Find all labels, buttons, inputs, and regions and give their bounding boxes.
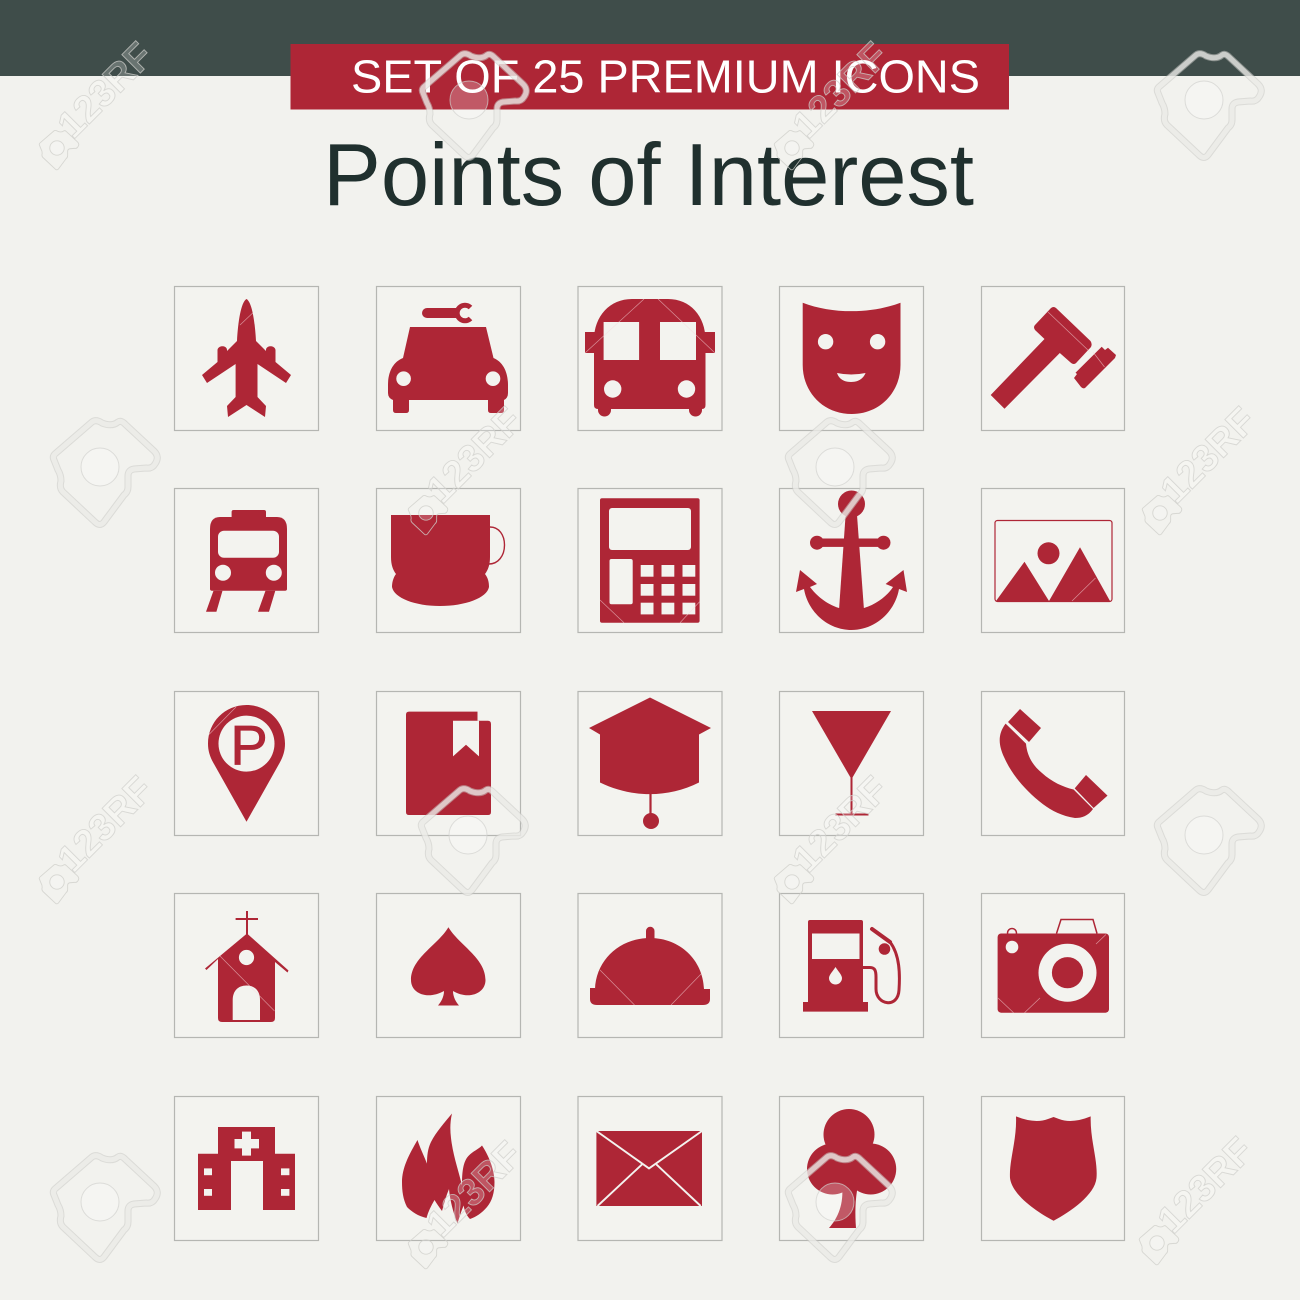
watermark: logo text: 123RF	[419, 400, 531, 512]
icon: book	[406, 712, 491, 815]
watermark: logo text: 123RF	[50, 35, 162, 147]
icon: camera	[998, 920, 1109, 1013]
banner text: SET OF 25 PREMIUM ICONS	[351, 50, 980, 102]
tile: calculator	[578, 488, 722, 632]
watermark: logo text: 123RF	[785, 35, 897, 147]
tile: envelope	[578, 1096, 722, 1240]
tile: airplane	[174, 286, 318, 430]
icon: bus	[585, 299, 715, 417]
icon: airplane	[202, 299, 291, 417]
icon: shield	[1010, 1116, 1097, 1221]
icon: picture	[995, 520, 1112, 602]
icon: envelope	[596, 1131, 702, 1206]
icon: telephone	[1000, 709, 1108, 818]
watermark: logo text: 123RF	[419, 1134, 531, 1246]
tile: car repair	[376, 286, 520, 430]
icon: food cloche	[590, 927, 710, 1005]
watermark: logo text: 123RF	[1153, 400, 1265, 512]
icon: coffee cup	[391, 515, 504, 606]
icon: graduation cap	[589, 698, 711, 829]
icon: parking pin	[208, 705, 285, 822]
label: P: P	[230, 713, 268, 776]
tile: picture	[982, 488, 1124, 632]
watermark: logo text: 123RF	[1150, 1130, 1262, 1242]
title: Points of Interest	[323, 125, 974, 224]
tile: theatre mask	[780, 286, 924, 430]
tile: bus	[578, 286, 722, 430]
banner	[290, 44, 1009, 110]
tile: fire	[376, 1096, 520, 1240]
tile: anchor	[780, 488, 924, 632]
tile: church	[174, 894, 318, 1038]
icon: gavel	[991, 307, 1116, 409]
watermark: logo text: 123RF	[785, 769, 897, 881]
icon: anchor	[796, 490, 907, 630]
watermark: logo text: 123RF	[50, 769, 162, 881]
icon: church	[205, 911, 288, 1022]
tile: hospital	[174, 1096, 318, 1240]
icon: calculator	[600, 498, 700, 623]
header bar	[0, 0, 1300, 76]
tile: camera	[982, 894, 1124, 1038]
tile: book	[376, 692, 520, 836]
tile: tree	[780, 1096, 924, 1240]
tile: graduation cap	[578, 692, 722, 836]
icon: flame	[402, 1114, 494, 1224]
icon: tree	[807, 1109, 896, 1228]
icon: mask	[803, 303, 900, 414]
icon: spade	[411, 927, 486, 1006]
tile: telephone	[982, 692, 1124, 836]
icon: train	[206, 510, 287, 612]
tile: gavel	[982, 286, 1124, 430]
tile: gas station	[780, 894, 924, 1038]
tile: cocktail	[780, 692, 924, 836]
tile: train	[174, 488, 318, 632]
icon: hospital	[198, 1127, 295, 1210]
tile: spade	[376, 894, 520, 1038]
icon: car with wrench	[388, 305, 508, 413]
tile: shield	[982, 1096, 1124, 1240]
tile: coffee cup	[376, 488, 520, 632]
tile: parking pin	[174, 692, 318, 836]
icon: gas pump	[803, 920, 899, 1012]
tile: food cloche	[578, 894, 722, 1038]
icon: cocktail	[812, 711, 891, 816]
